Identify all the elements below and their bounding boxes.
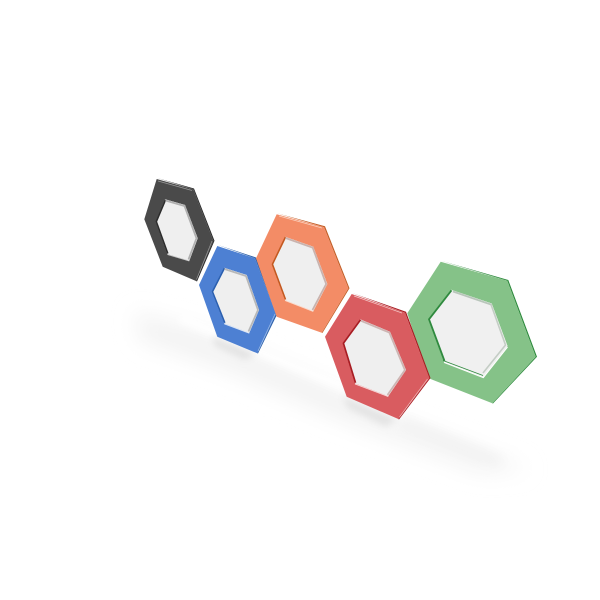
hole panel xyxy=(156,199,198,261)
hole panel xyxy=(212,268,259,333)
ground shadow xyxy=(135,312,530,472)
hole panel xyxy=(272,237,327,311)
hexagon: dark grey xyxy=(144,178,214,282)
hexagon: green xyxy=(407,261,537,404)
hole panel xyxy=(428,290,508,377)
hexagon: orange xyxy=(256,213,350,333)
hexagon: red xyxy=(325,293,430,420)
hexagon: blue xyxy=(199,245,277,354)
hole panel xyxy=(343,319,406,396)
